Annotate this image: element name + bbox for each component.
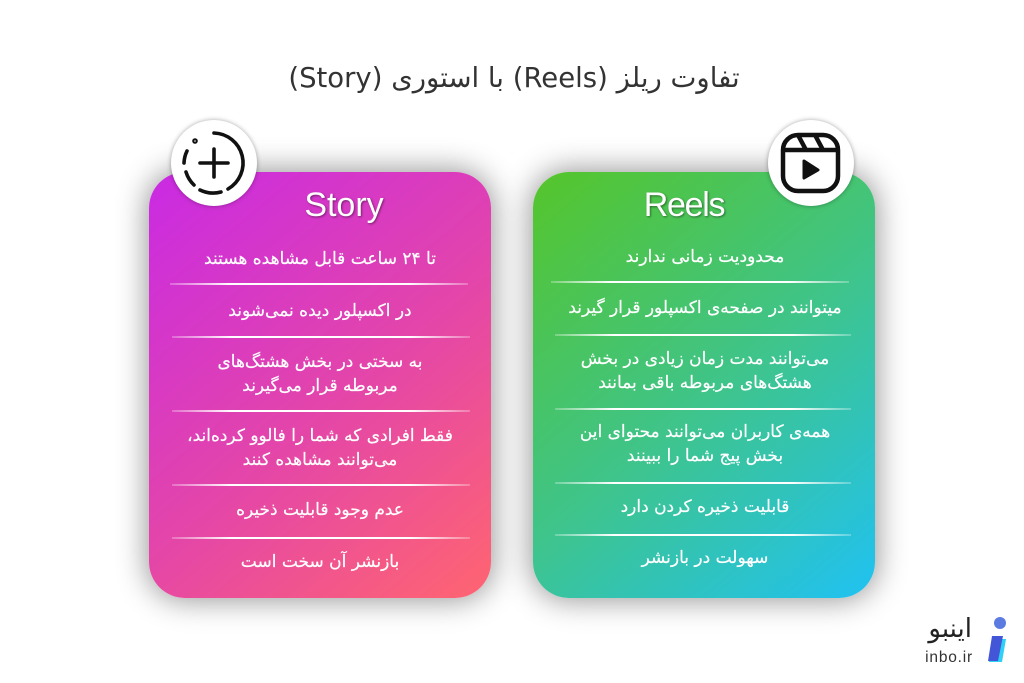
text: story item 1: تا ۲۴ ساعت قابل مشاهده هستند [204, 249, 436, 269]
text: reels item 3: می‌توانند مدت زمان زیادی در بخش [581, 349, 829, 369]
text: story item 2: در اکسپلور دیده نمی‌شوند [228, 301, 412, 321]
text: reels item 4 [580, 422, 830, 466]
text: reels item 5: قابلیت ذخیره کردن دارد [621, 497, 789, 517]
text: reels item 6: سهولت در بازنشر [642, 548, 768, 568]
panel: story [149, 172, 491, 598]
text: story item 3: مربوطه قرار می‌گیرند [242, 376, 398, 396]
logo domain: inbo.ir [925, 649, 973, 666]
text: story item 4: می‌توانند مشاهده کنند [243, 450, 397, 470]
heading: story: Story [304, 186, 384, 224]
text: story item 3: به سختی در بخش هشتگ‌های [217, 352, 423, 372]
text: story item 4 [187, 426, 453, 470]
panel: reels [533, 172, 875, 598]
text: story item 3 [217, 352, 423, 396]
title: تفاوت ریلز (Reels) با استوری (Story) [288, 62, 740, 94]
text: reels item 4: بخش پیج شما را ببینند [627, 446, 783, 466]
text: story item 6: بازنشر آن سخت است [241, 552, 399, 572]
text: reels item 2: میتوانند در صفحه‌ی اکسپلور قرار گیرند [568, 298, 842, 318]
text: reels item 3 [581, 349, 829, 392]
logo: inbo [925, 614, 1006, 666]
logo wordmark: اینبو [928, 614, 972, 644]
logo icon [988, 617, 1006, 662]
icon: story badge [171, 120, 257, 206]
heading: reels: Reels [644, 186, 724, 224]
text: reels item 4: همه‌ی کاربران می‌توانند محتوای این [580, 422, 830, 442]
icon: reels badge [768, 120, 854, 206]
text: reels item 1: محدودیت زمانی ندارند [626, 247, 784, 267]
text: story item 5: عدم وجود قابلیت ذخیره [236, 500, 404, 520]
text: reels item 3: هشتگ‌های مربوطه باقی بمانند [598, 372, 812, 392]
text: story item 4: فقط افرادی که شما را فالوو کرده‌اند، [187, 426, 453, 446]
